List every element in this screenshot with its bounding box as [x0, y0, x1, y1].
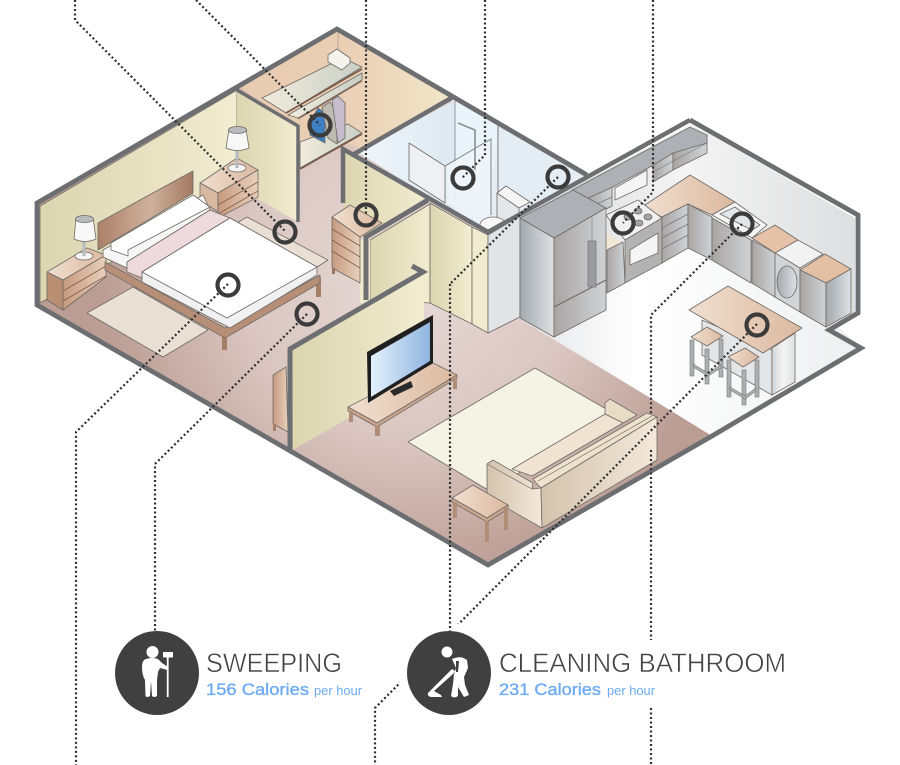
bedroom: bed — [103, 195, 321, 350]
kitchen: counters and base cabinets — [606, 175, 851, 327]
living room: side table — [452, 485, 508, 542]
text: cleaning bathroom — [499, 648, 786, 699]
wall: small room walls — [343, 150, 520, 333]
text: cleaning bathroom: 231 Calories — [499, 680, 601, 699]
text: sweeping: per hour — [314, 684, 362, 698]
bedroom: left nightstand with lamp — [47, 216, 106, 310]
living room: TV stand — [348, 363, 457, 436]
living room: TV wall — [290, 266, 424, 452]
dotted leader: vertical through sofa, upper part — [651, 224, 742, 417]
dotted leader lines — [75, 0, 757, 765]
interior walls: grey wall tops — [237, 90, 690, 300]
kitchen: island with two stools — [689, 286, 802, 405]
knockout behind cleaning bathroom badge — [399, 623, 499, 723]
living room: side cabinet — [273, 367, 288, 432]
bedroom: right nightstand with lamp — [200, 126, 258, 218]
living room: television — [367, 315, 433, 403]
floor: bedroom and living room — [37, 30, 712, 565]
kitchen: refrigerator — [520, 190, 606, 337]
room: bathroom — [358, 100, 587, 236]
bedroom: dresser — [332, 205, 382, 283]
bedroom: headboard — [98, 171, 193, 250]
bedroom: rugs — [87, 217, 328, 357]
kitchen: upper cabinets — [572, 127, 707, 216]
outer wall outline — [37, 29, 861, 565]
icon: person mopping — [407, 631, 491, 715]
floor: kitchen — [518, 205, 862, 435]
text: cleaning bathroom: CLEANING BATHROOM — [499, 648, 786, 678]
activity markers — [218, 114, 768, 336]
text: sweeping — [206, 648, 362, 699]
text: sweeping: SWEEPING — [206, 648, 342, 678]
text: sweeping: 156 Calories — [206, 680, 309, 699]
text: cleaning bathroom: per hour — [607, 684, 655, 698]
icon: person sweeping — [115, 631, 199, 715]
room: walk-in closet — [240, 30, 450, 169]
living room: rug — [408, 368, 620, 490]
wall: bedroom back wall — [40, 90, 237, 303]
living room: sofa — [487, 399, 657, 528]
kitchen: rear wall and side wall — [515, 124, 855, 327]
dotted leader: bathroom to badge — [449, 284, 451, 632]
wall: closet partition — [237, 90, 298, 222]
